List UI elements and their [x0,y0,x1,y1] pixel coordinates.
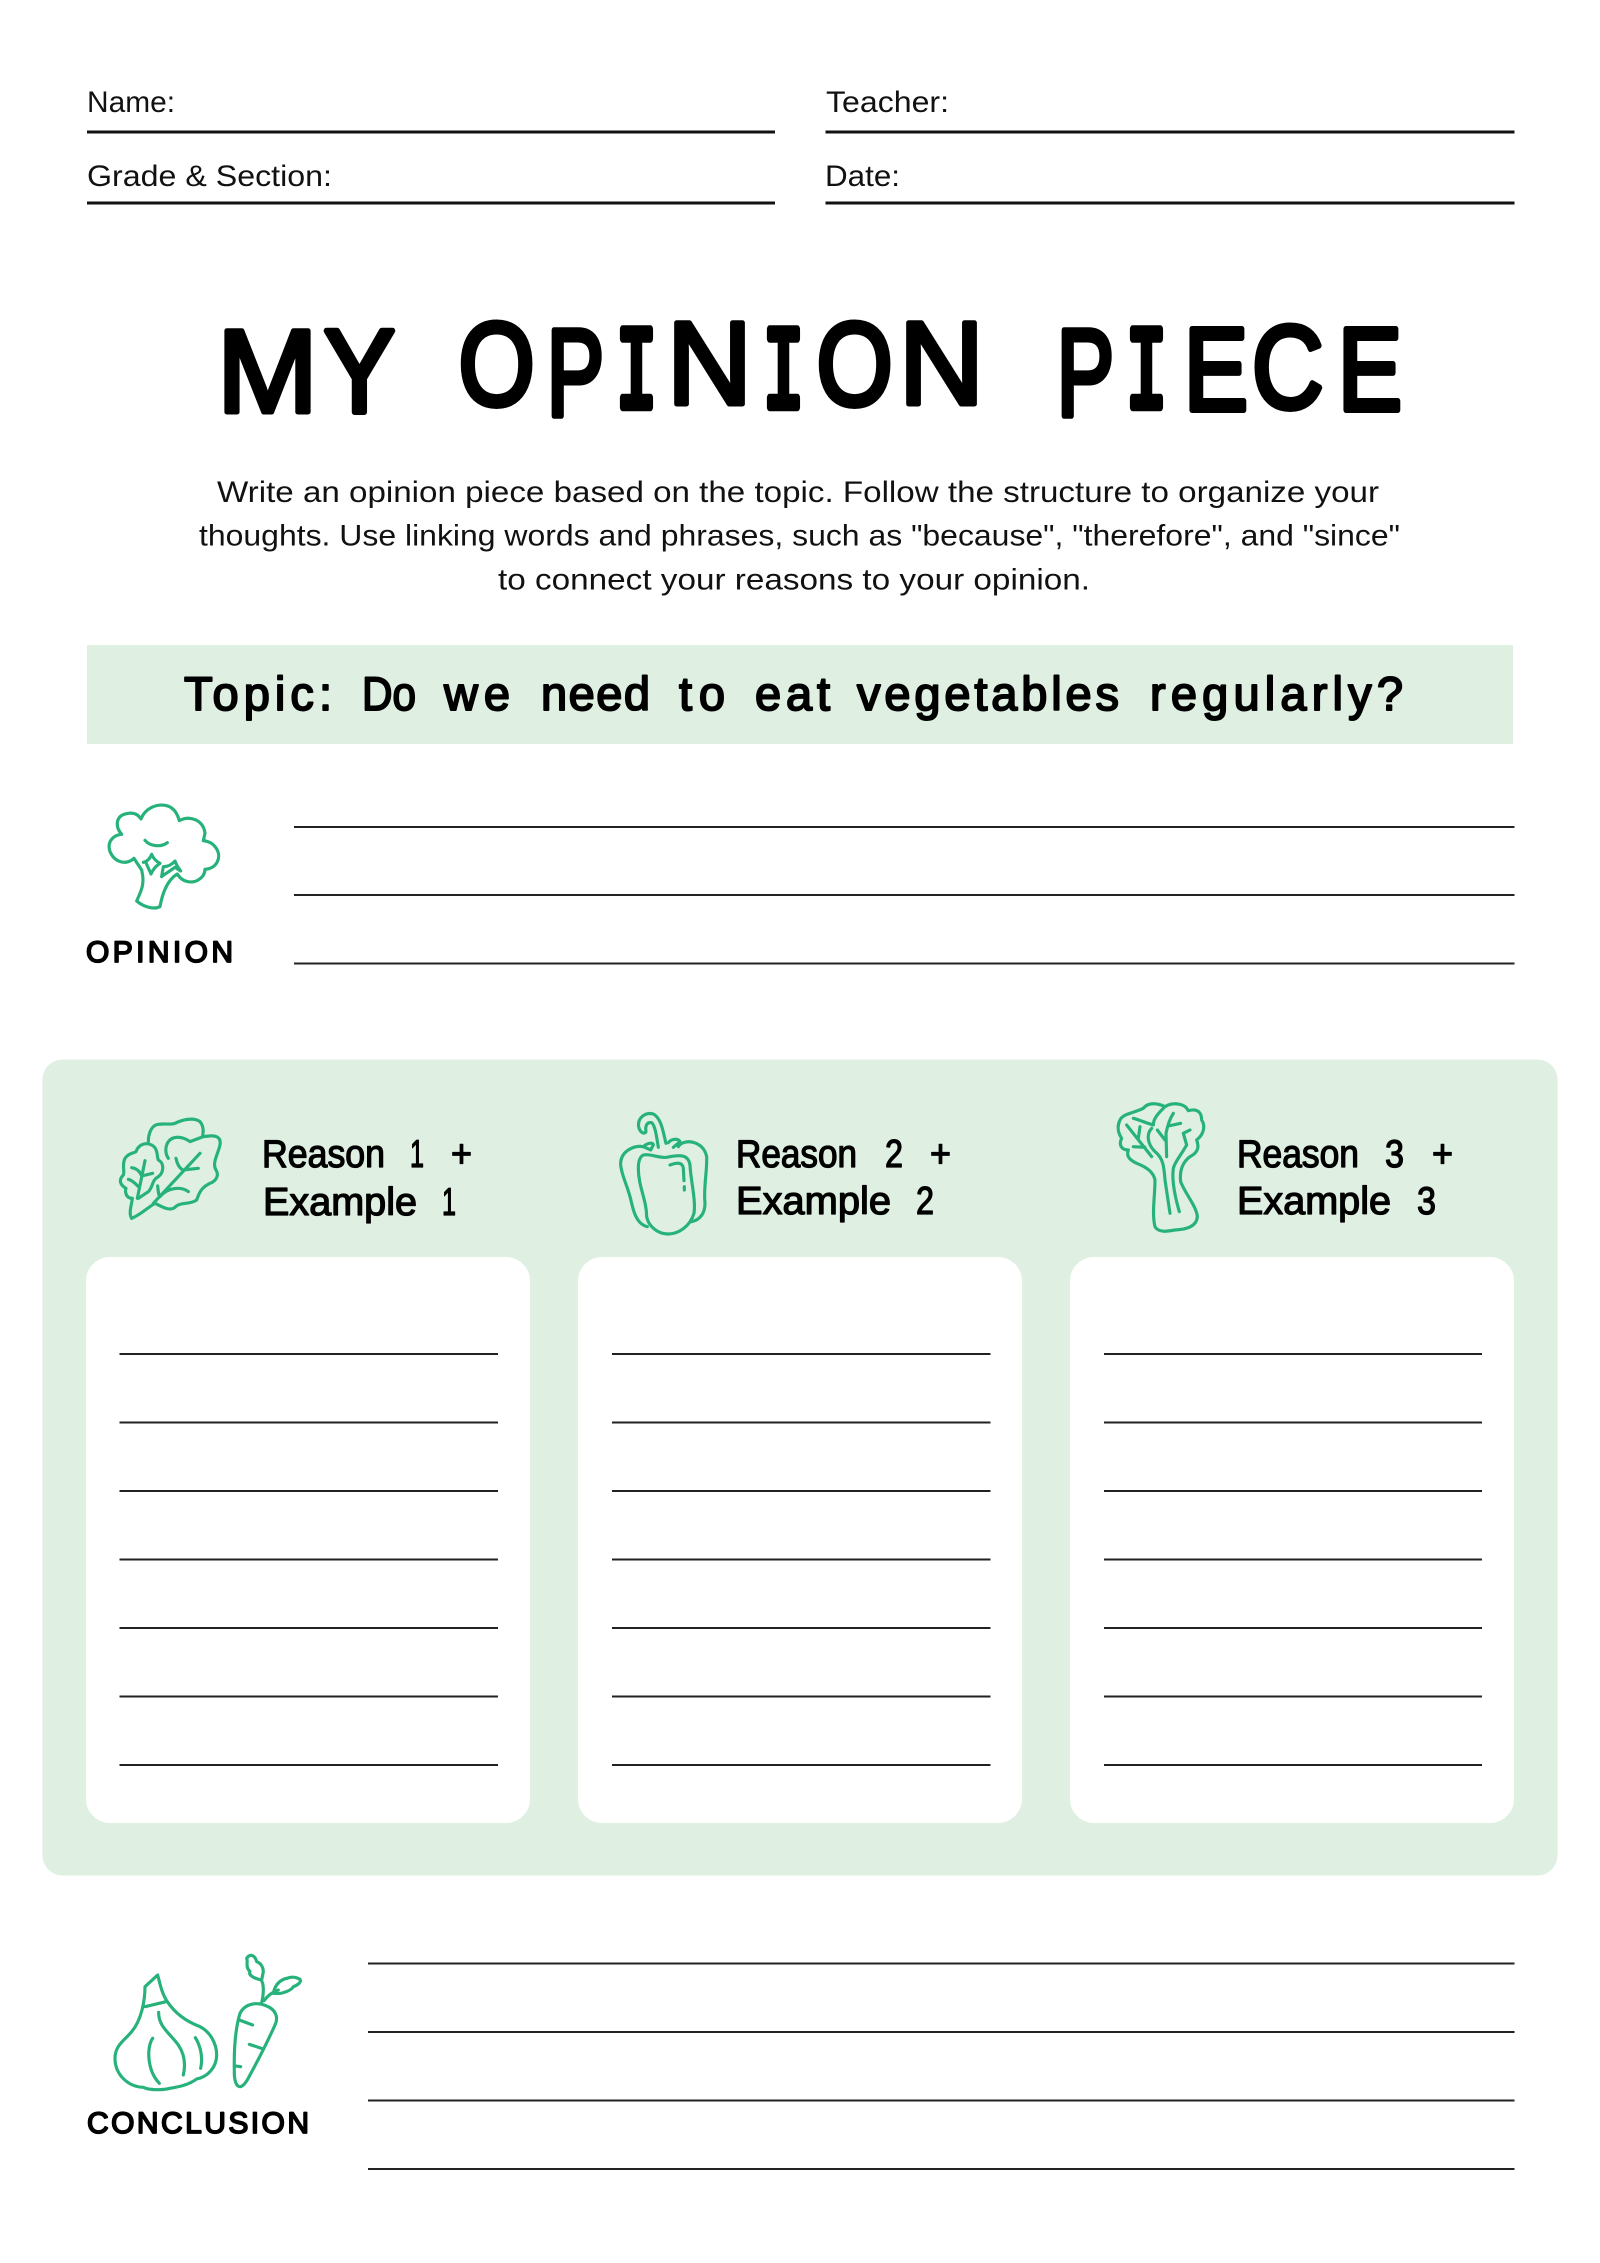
title: O [817,299,893,431]
reason 1 heading: 1 [442,1181,456,1224]
title: I [762,310,804,443]
reason 2 column [578,1114,1022,1823]
icon: carrot [234,1955,300,2087]
teacher field: Teacher: [826,86,949,119]
topic text: regularly? [1150,667,1403,720]
date field: Date: [825,160,900,193]
title: N [899,298,984,430]
reason 2 heading: 2 [916,1180,934,1223]
grade and section field: Grade & Section: [87,160,332,193]
conclusion section [87,1955,1514,2169]
student information form [87,86,1514,203]
panel: reasons [42,1060,1558,1876]
reason 3 heading: Reason [1237,1133,1359,1176]
reason 1 column [86,1119,530,1823]
instructions text: thoughts. Use linking words and phrases, such as "because", "therefore", and "since" [199,520,1400,552]
reason 2 card [578,1257,1022,1823]
title: P [1057,305,1114,443]
title: O [459,299,535,431]
title: N [667,298,752,430]
reason 1 heading: + [451,1133,472,1176]
title: I [1126,310,1168,443]
reason 3 heading: + [1432,1133,1453,1176]
title: Y [324,306,393,438]
topic text: need [541,667,650,720]
title: E [1184,304,1248,436]
reason 1 heading: 1 [410,1133,424,1176]
opinion label: OPINION [86,936,233,969]
reason 2 heading: 2 [885,1133,903,1176]
opinion section [86,805,1514,969]
icon: broccoli [109,805,219,908]
reason 2 heading: Example [736,1180,891,1223]
reason 2 heading [736,1133,951,1223]
icon: garlic [115,1975,217,2090]
opinion writing lines [294,827,1514,964]
icon: lettuce [120,1119,220,1218]
instructions text: Write an opinion piece based on the topic. Follow the structure to organize your [217,476,1379,509]
icon: bok choy [1118,1104,1204,1231]
conclusion label: CONCLUSION [87,2107,309,2140]
topic text: eat [755,667,830,720]
reason 1 heading: Example [263,1181,417,1224]
title: E [1338,304,1402,436]
icon: bell pepper [621,1114,707,1234]
reason 2 heading: Reason [736,1133,857,1176]
reason 3 heading [1237,1133,1453,1223]
instructions text: to connect your reasons to your opinion. [498,564,1090,596]
conclusion writing lines [368,1964,1514,2169]
topic banner [87,645,1513,744]
instructions text [199,476,1400,596]
reason 1 heading: Reason [262,1133,385,1176]
reason 3 card [1070,1257,1514,1823]
reason 1 card [86,1257,530,1823]
topic text: to [679,667,725,720]
topic text: Topic: [184,667,332,720]
reason 3 heading: 3 [1385,1133,1404,1176]
title: P [547,305,604,443]
title: C [1252,302,1324,434]
topic text: Do [362,667,416,720]
topic text: we [443,667,510,720]
title: I [616,310,658,443]
reason 3 heading: Example [1237,1180,1391,1223]
topic text: vegetables [857,667,1119,720]
reason 3 heading: 3 [1417,1180,1436,1223]
title: M [217,306,318,438]
reason 3 column [1070,1104,1514,1823]
reason 1 heading [262,1133,472,1224]
reason 2 heading: + [930,1133,951,1176]
name field: Name: [87,86,175,119]
